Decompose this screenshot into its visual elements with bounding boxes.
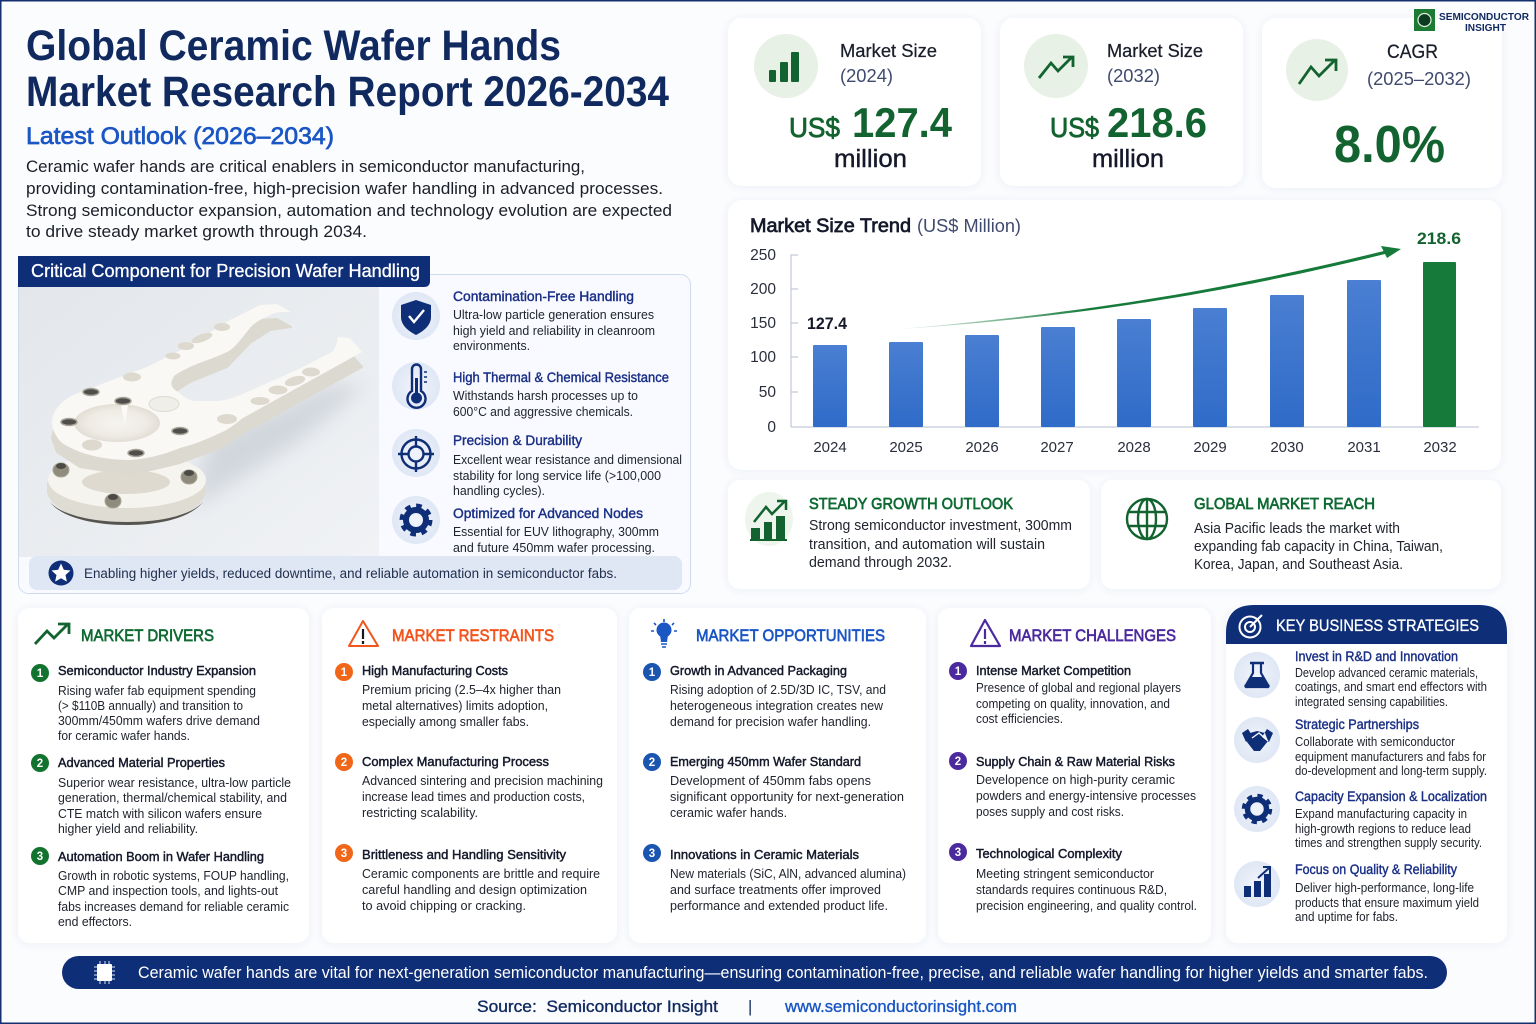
challenge 3: [949, 843, 1197, 913]
driver 3: [31, 847, 290, 929]
panel: market challenges: [938, 608, 1211, 943]
feature: contamination-free: high yield and reliability in cleanroom: [453, 323, 655, 338]
header: key business strategies: KEY BUSINESS STRATEGIES: [1276, 616, 1479, 635]
KPI card: CAGR: 8.0%: [1334, 116, 1445, 174]
opportunity 3: Innovations in Ceramic Materials: [670, 847, 859, 862]
chart title: (US$ Million): [917, 216, 1021, 236]
logo: [1414, 9, 1529, 34]
challenge 3: Meeting stringent semiconductor: [976, 866, 1155, 881]
x axis labels: [813, 439, 1457, 456]
KPI card: market size 2032: Market Size: [1107, 40, 1203, 61]
icon: target: [392, 429, 440, 477]
feature: contamination-free: Ultra-low particle generation ensures: [453, 307, 654, 322]
y axis: 250: [750, 247, 776, 264]
icon: shield: [392, 292, 440, 340]
feature: precision: stability for long service life (>100,000: [453, 468, 661, 483]
challenge 1: 1: [955, 666, 962, 678]
feature: precision: handling cycles).: [453, 483, 545, 498]
x axis labels: 2028: [1117, 439, 1151, 456]
KPI card: market size 2032: [1000, 18, 1243, 186]
driver 2: CTE match with silicon wafers ensure: [58, 806, 262, 821]
feature: contamination-free: [453, 289, 655, 353]
strategy 2: Collaborate with semiconductor: [1295, 734, 1456, 749]
feature: precision: Excellent wear resistance and dimensional: [453, 452, 682, 467]
heading: market drivers: MARKET DRIVERS: [81, 627, 214, 645]
icon: chip: [94, 961, 115, 984]
opportunity 2: [643, 753, 904, 820]
opportunity 3: 3: [649, 848, 655, 860]
driver 3: CMP and inspection tools, and lights-out: [58, 883, 278, 898]
feature: precision: Precision & Durability: [453, 433, 582, 448]
panel: steady growth outlook: demand through 2032.: [809, 555, 952, 571]
restraint 2: Complex Manufacturing Process: [362, 754, 549, 769]
challenge 2: 2: [955, 756, 961, 768]
panel: steady growth outlook: transition, and automation will sustain: [809, 537, 1045, 553]
bars: [813, 262, 1456, 427]
KPI card: CAGR: [1262, 18, 1502, 188]
KPI card: market size 2032: (2032): [1107, 66, 1160, 86]
panel: steady growth outlook: Strong semiconductor investment, 300mm: [809, 518, 1072, 534]
source line: Source: Semiconductor Insight: [477, 998, 718, 1016]
strategy 3: Capacity Expansion & Localization: [1295, 789, 1487, 804]
intro paragraph: [26, 157, 672, 241]
logo: INSIGHT: [1465, 22, 1507, 34]
driver 3: Growth in robotic systems, FOUP handling,: [58, 868, 289, 883]
callout: higher yields: [29, 556, 682, 590]
KPI card: market size 2024: (2024): [840, 66, 893, 86]
panel: market opportunities: [629, 608, 926, 943]
x axis labels: 2031: [1347, 439, 1381, 456]
restraint 1: metal alternatives) limits adoption,: [362, 698, 548, 713]
opportunity 1: [643, 663, 886, 729]
strategy 3: [1234, 786, 1487, 850]
feature: contamination-free: environments.: [453, 338, 530, 353]
restraint 3: careful handling and design optimization: [362, 882, 587, 897]
source line: www.semiconductorinsight.com: [784, 998, 1017, 1016]
feature: thermal resistance: High Thermal & Chemical Resistance: [453, 370, 669, 385]
feature: advanced nodes: Optimized for Advanced Nodes: [453, 506, 643, 521]
strategy 4: products that ensure maximum yield: [1295, 895, 1479, 910]
opportunity 2: significant opportunity for next-generation: [670, 789, 904, 804]
icon: thermometer: [392, 362, 440, 410]
driver 1: (> $110B annually) and transition to: [58, 698, 243, 713]
restraint 3: Brittleness and Handling Sensitivity: [362, 847, 566, 862]
header: critical component: Critical Component for Precision Wafer Handling: [31, 261, 420, 281]
strategy 2: [1234, 717, 1487, 778]
restraint 3: 3: [341, 848, 347, 860]
strategy 4: Focus on Quality & Reliability: [1295, 862, 1457, 877]
y axis: 200: [750, 281, 776, 298]
panel: critical component: [18, 256, 690, 594]
feature: advanced nodes: and future 450mm wafer processing.: [453, 540, 655, 555]
restraint 1: [335, 663, 561, 729]
restraint 3: to avoid chipping or cracking.: [362, 898, 526, 913]
challenge 2: Supply Chain & Raw Material Risks: [976, 754, 1175, 769]
callout: higher yields: Enabling higher yields, reduced downtime, and reliable automation in semiconductor fabs.: [84, 566, 617, 581]
challenge 2: powders and energy-intensive processes: [976, 788, 1196, 803]
driver 2: Superior wear resistance, ultra-low particle: [58, 775, 291, 790]
challenge 2: [949, 752, 1196, 819]
panel: market size trend chart: [728, 200, 1501, 470]
strategy 2: equipment manufacturers and fabs for: [1295, 749, 1487, 764]
challenge 1: Intense Market Competition: [976, 663, 1131, 678]
feature: thermal resistance: [453, 370, 669, 419]
opportunity 1: 1: [649, 667, 656, 679]
driver 1: 300mm/450mm wafers drive demand: [58, 713, 260, 728]
panel: global market reach: Asia Pacific leads the market with: [1194, 521, 1400, 537]
opportunity 2: 2: [649, 757, 655, 769]
title: Global Ceramic Wafer Hands: [26, 22, 561, 70]
chart title: Market Size Trend: [750, 215, 911, 237]
chart title: [750, 215, 1021, 237]
opportunity 2: ceramic wafer hands.: [670, 805, 787, 820]
strategy 3: Expand manufacturing capacity in: [1295, 806, 1467, 821]
source line: [477, 998, 1017, 1016]
panel: global market reach: expanding fab capacity in China, Taiwan,: [1194, 539, 1443, 555]
restraint 2: restricting scalability.: [362, 805, 478, 820]
challenge 3: 3: [955, 847, 961, 859]
bottom banner: Ceramic wafer hands are vital for next-generation semiconductor manufacturing—ensuring contamination-free, precise, and reliable wafer handling for higher yields and smarter fabs.: [138, 964, 1428, 982]
y axis: 0: [767, 419, 776, 436]
challenge 1: [949, 662, 1181, 726]
heading: market opportunities: MARKET OPPORTUNITIES: [696, 627, 885, 645]
challenge 2: poses supply and cost risks.: [976, 804, 1124, 819]
feature: contamination-free: Contamination-Free Handling: [453, 289, 634, 304]
x axis labels: 2027: [1040, 439, 1074, 456]
opportunity 1: heterogeneous integration creates new: [670, 698, 884, 713]
KPI card: CAGR: CAGR: [1387, 42, 1438, 63]
panel: market restraints: [322, 608, 617, 943]
x axis labels: 2032: [1423, 439, 1457, 456]
KPI card: market size 2024: million: [834, 145, 907, 173]
feature: thermal resistance: Withstands harsh processes up to: [453, 388, 638, 403]
challenge 2: Developence on high-purity ceramic: [976, 772, 1176, 787]
strategy 3: high-growth regions to reduce lead: [1295, 821, 1471, 836]
challenge 3: Technological Complexity: [976, 846, 1122, 861]
driver 3: end effectors.: [58, 914, 132, 929]
restraint 2: increase lead times and production costs,: [362, 789, 585, 804]
icon: warning triangle: [349, 621, 378, 646]
y axis: 50: [759, 384, 776, 401]
restraint 3: [335, 844, 600, 913]
strategy 4: Deliver high-performance, long-life: [1295, 880, 1474, 895]
strategy 1: Develop advanced ceramic materials,: [1295, 665, 1478, 680]
intro paragraph: Strong semiconductor expansion, automation and technology evolution are expected: [26, 201, 672, 220]
x axis labels: 2024: [813, 439, 847, 456]
driver 1: for ceramic wafer hands.: [58, 728, 190, 743]
icon: challenge triangle: [971, 620, 1000, 646]
KPI card: market size 2032: 218.6: [1107, 99, 1207, 146]
logo: SEMICONDUCTOR: [1439, 11, 1529, 23]
feature: advanced nodes: [453, 506, 659, 555]
driver 1: Semiconductor Industry Expansion: [58, 663, 256, 678]
strategy 1: [1234, 649, 1487, 709]
opportunity 3: and surface treatments offer improved: [670, 882, 881, 897]
opportunity 2: Development of 450mm fabs opens: [670, 773, 871, 788]
driver 3: Automation Boom in Wafer Handling: [58, 849, 264, 864]
restraint 2: 2: [341, 757, 347, 769]
opportunity 1: Rising adoption of 2.5D/3D IC, TSV, and: [670, 682, 886, 697]
intro paragraph: to drive steady market growth through 2034.: [26, 222, 367, 241]
intro paragraph: Ceramic wafer hands are critical enablers in semiconductor manufacturing,: [26, 157, 585, 176]
strategy 3: times and strengthen supply security.: [1295, 835, 1482, 850]
y axis: [750, 247, 1479, 436]
driver 1: 1: [37, 668, 44, 680]
restraint 1: especially among smaller fabs.: [362, 714, 529, 729]
strategy 1: integrated sensing capabilities.: [1295, 694, 1448, 709]
heading: market restraints: MARKET RESTRAINTS: [392, 627, 554, 645]
challenge 1: Presence of global and regional players: [976, 680, 1181, 695]
strategy 2: Strategic Partnerships: [1295, 717, 1419, 732]
restraint 1: 1: [341, 667, 348, 679]
opportunity 1: Growth in Advanced Packaging: [670, 663, 847, 678]
restraint 1: Premium pricing (2.5–4x higher than: [362, 682, 561, 697]
panel: global market reach: [1101, 480, 1501, 589]
restraint 3: Ceramic components are brittle and require: [362, 866, 600, 881]
bottom banner: [62, 956, 1447, 989]
y axis: 100: [750, 349, 776, 366]
driver 1: Rising wafer fab equipment spending: [58, 683, 256, 698]
x axis labels: 2025: [889, 439, 923, 456]
strategy 2: do-development and long-term supply.: [1295, 763, 1487, 778]
feature: thermal resistance: 600°C and aggressive chemicals.: [453, 404, 633, 419]
header: key business strategies: [1226, 605, 1507, 644]
heading: market challenges: MARKET CHALLENGES: [1009, 627, 1176, 645]
arrow: growth trend: [887, 246, 1401, 330]
restraint 1: High Manufacturing Costs: [362, 663, 508, 678]
opportunity 2: Emerging 450mm Wafer Standard: [670, 754, 861, 769]
source line: |: [748, 998, 752, 1016]
KPI card: market size 2032: million: [1092, 145, 1164, 173]
intro paragraph: providing contamination-free, high-precision wafer handling in advanced processes.: [26, 179, 663, 198]
restraint 2: Advanced sintering and precision machining: [362, 773, 603, 788]
subtitle: Latest Outlook (2026–2034): [26, 123, 334, 150]
driver 2: generation, thermal/chemical stability, and: [58, 790, 287, 805]
challenge 1: competing on quality, innovation, and: [976, 696, 1170, 711]
driver 2: higher yield and reliability.: [58, 821, 198, 836]
challenge 1: cost efficiencies.: [976, 711, 1063, 726]
strategy 4: [1234, 861, 1479, 924]
x axis labels: 2029: [1193, 439, 1227, 456]
icon: light bulb: [651, 619, 677, 647]
driver 3: fabs increases demand for reliable ceramic: [58, 899, 290, 914]
driver 1: [31, 663, 260, 743]
panel: global market reach: GLOBAL MARKET REACH: [1194, 496, 1375, 513]
KPI card: market size 2024: [728, 18, 981, 186]
challenge 3: standards requires continuous R&D,: [976, 882, 1167, 897]
driver 2: 2: [37, 758, 43, 770]
opportunity 1: demand for precision wafer handling.: [670, 714, 871, 729]
header: critical component: [18, 256, 430, 287]
KPI card: CAGR: (2025–2032): [1367, 69, 1471, 89]
title: Market Research Report 2026-2034: [26, 68, 669, 116]
KPI card: market size 2024: US$: [789, 112, 840, 143]
icon: gear: [392, 496, 440, 544]
panel: key business strategies: [1226, 605, 1507, 943]
strategy 1: Invest in R&D and Innovation: [1295, 649, 1458, 664]
panel: steady growth outlook: [728, 480, 1090, 589]
restraint 2: [335, 753, 603, 820]
KPI card: market size 2032: US$: [1050, 112, 1099, 143]
KPI card: market size 2024: Market Size: [840, 40, 937, 61]
x axis labels: 2026: [965, 439, 999, 456]
icon: trend arrow: [35, 624, 69, 644]
data label 2024: 127.4: [807, 315, 848, 333]
panel: steady growth outlook: STEADY GROWTH OUTLOOK: [809, 496, 1013, 513]
strategy 1: coatings, and smart end effectors with: [1295, 679, 1487, 694]
panel: global market reach: Korea, Japan, and Southeast Asia.: [1194, 557, 1403, 573]
KPI card: market size 2024: 127.4: [852, 99, 953, 146]
challenge 3: precision engineering, and quality control.: [976, 898, 1197, 913]
opportunity 3: [643, 844, 906, 913]
opportunity 3: performance and extended product life.: [670, 898, 888, 913]
opportunity 3: New materials (SiC, AlN, advanced alumina): [670, 866, 906, 881]
driver 2: Advanced Material Properties: [58, 755, 225, 770]
feature: advanced nodes: Essential for EUV lithography, 300mm: [453, 524, 659, 539]
title: [26, 22, 669, 116]
product image: ceramic wafer hand: [19, 287, 379, 557]
strategy 4: and uptime for fabs.: [1295, 909, 1398, 924]
data label 2032: 218.6: [1417, 229, 1461, 248]
x axis labels: 2030: [1270, 439, 1304, 456]
panel: market drivers: [18, 608, 309, 943]
driver 2: [31, 754, 291, 836]
driver 3: 3: [37, 851, 43, 863]
y axis: 150: [750, 315, 776, 332]
feature: precision: [453, 433, 682, 498]
